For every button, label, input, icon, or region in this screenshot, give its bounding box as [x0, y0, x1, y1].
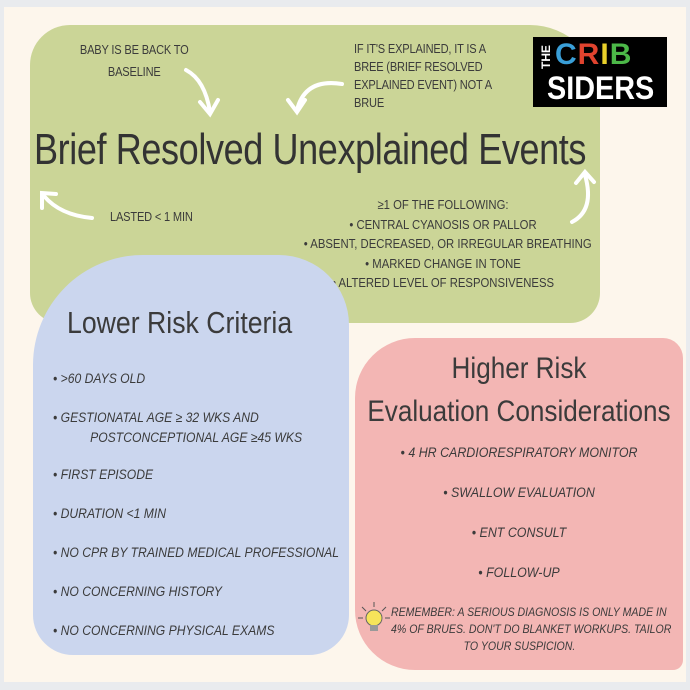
list: • 4 HR CARDIORESPIRATORY MONITOR	[401, 445, 637, 460]
text: criteria list: ≥1 OF THE FOLLOWING:	[377, 197, 509, 212]
text: baby back to baseline	[80, 42, 189, 79]
text: BREE note: BRUE	[354, 95, 384, 110]
text: baby back to baseline: BABY IS BE BACK TO	[80, 42, 189, 57]
list: • SWALLOW EVALUATION	[443, 485, 595, 500]
heading: Evaluation Considerations	[367, 395, 671, 428]
arrow: lasted	[42, 193, 92, 218]
list: • DURATION <1 MIN	[53, 506, 166, 521]
text: criteria list: • CENTRAL CYANOSIS OR PALLOR	[349, 216, 537, 232]
logo: The Crib Siders: SIDERS	[547, 70, 654, 106]
list: • NO CONCERNING HISTORY	[53, 584, 222, 599]
text: BREE note: IF IT'S EXPLAINED, IT IS A	[354, 41, 486, 56]
list: POSTCONCEPTIONAL AGE ≥45 WKS	[90, 430, 302, 445]
panel: lower risk criteria	[33, 255, 349, 655]
panel: higher risk	[355, 338, 683, 670]
heading: Higher Risk	[452, 352, 586, 385]
text: criteria list: • ABSENT, DECREASED, OR IRREGULAR BREATHING	[304, 236, 592, 251]
text: criteria list	[304, 197, 592, 290]
heading: Lower Risk Criteria	[67, 305, 292, 340]
list	[53, 371, 339, 638]
text: BREE note: BREE (BRIEF RESOLVED	[354, 59, 482, 74]
arrow: BREE to title	[288, 83, 342, 112]
list: • FIRST EPISODE	[53, 467, 153, 482]
logo: The Crib Siders: THE	[539, 45, 553, 69]
logo: The Crib Siders	[533, 37, 667, 107]
text: baby back to baseline: BASELINE	[108, 64, 161, 79]
list: • >60 DAYS OLD	[53, 371, 145, 386]
logo: The Crib Siders: CRIB	[555, 38, 632, 71]
heading	[367, 352, 671, 428]
list	[401, 445, 638, 580]
list: • ENT CONSULT	[472, 525, 566, 540]
title: Brief Resolved Unexplained Events	[34, 125, 586, 174]
text: criteria list: • MARKED CHANGE IN TONE	[365, 256, 521, 270]
callout: remember: 4% OF BRUES. DON'T DO BLANKET WORKUPS. TAILOR	[391, 622, 671, 636]
arrow: baseline to title	[186, 70, 218, 114]
list: • NO CPR BY TRAINED MEDICAL PROFESSIONAL	[53, 545, 339, 560]
text: criteria list: • ALTERED LEVEL OF RESPONSIVENESS	[332, 275, 554, 290]
callout: remember	[391, 605, 671, 653]
callout: remember: REMEMBER: A SERIOUS DIAGNOSIS IS ONLY MADE IN	[391, 605, 667, 619]
text: BREE note	[354, 41, 492, 110]
panel: green BRUE definition	[30, 25, 600, 323]
list: • GESTIONATAL AGE ≥ 32 WKS AND	[53, 410, 259, 425]
arrow: criteria	[572, 172, 594, 222]
list: • NO CONCERNING PHYSICAL EXAMS	[53, 623, 274, 638]
text: lasted < 1 min: LASTED < 1 MIN	[110, 209, 193, 224]
text: BREE note: EXPLAINED EVENT) NOT A	[354, 77, 492, 92]
list: • FOLLOW-UP	[478, 565, 560, 580]
callout: remember: TO YOUR SUSPICION.	[464, 639, 575, 653]
icon: lightbulb	[358, 602, 390, 631]
